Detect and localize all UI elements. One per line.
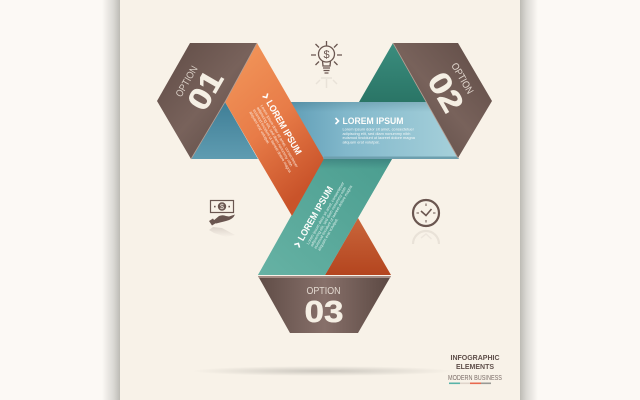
body copy: aliquam erat volutpat. bbox=[248, 110, 271, 145]
body copy: adipiscing elit, sed diam nonummy nibh bbox=[342, 131, 410, 136]
footer title: ELEMENTS bbox=[456, 364, 494, 371]
orange ribbon band bbox=[225, 43, 324, 216]
heading: LOREM IPSUM bbox=[263, 99, 303, 157]
trapezoid 03 top highlight bbox=[258, 276, 391, 278]
left panel shadow bbox=[102, 0, 120, 400]
body copy: adipiscing elit, sed diam nonummy nibh bbox=[309, 186, 347, 247]
body copy: euismod tincidunt ut laoreet dolore magna bbox=[252, 108, 293, 174]
heading: LOREM IPSUM bbox=[296, 185, 336, 243]
clock reflection bbox=[413, 231, 439, 244]
hexagon 01 edge highlight bbox=[191, 43, 257, 159]
blue band inner shadow bbox=[285, 102, 432, 112]
body copy: euismod tincidunt ut laoreet dolore magna bbox=[342, 135, 416, 140]
text block: teal ribbon bbox=[293, 174, 357, 258]
footer title: MODERN BUSINESS bbox=[448, 375, 502, 382]
hexagon 02 edge highlight bbox=[393, 43, 458, 158]
icon: hand holding money bbox=[209, 200, 235, 237]
teal overlap top shadow bbox=[318, 159, 392, 169]
icon: clock bbox=[413, 200, 439, 244]
text block: blue ribbon bbox=[336, 116, 416, 144]
icon: light bulb with dollar: $ bbox=[323, 49, 330, 61]
label: option 02: 02 bbox=[420, 66, 471, 118]
body copy: Lorem ipsum dolor sit amet, consectetuer bbox=[305, 180, 346, 245]
right panel shadow bbox=[520, 0, 538, 400]
body copy: Lorem ipsum dolor sit amet, consectetuer bbox=[342, 126, 415, 132]
blue triangle fold bbox=[191, 102, 258, 159]
label: option 03: OPTION bbox=[306, 286, 340, 297]
body copy: aliquam erat volutpat. bbox=[316, 217, 339, 252]
teal ribbon band bbox=[258, 159, 392, 275]
teal overlap over orange bbox=[258, 159, 392, 275]
label: option 01: 01 bbox=[180, 64, 231, 116]
bulb reflection bbox=[316, 78, 337, 88]
chevron bbox=[262, 93, 269, 99]
body copy bbox=[342, 126, 416, 144]
red triangle fold bbox=[325, 218, 391, 275]
body copy: aliquam erat volutpat. bbox=[342, 139, 380, 144]
blue ribbon band bbox=[285, 102, 459, 159]
body copy: euismod tincidunt ut laoreet dolore magna bbox=[313, 184, 354, 250]
body copy: adipiscing elit, sed diam nonummy nibh bbox=[256, 106, 294, 167]
ground shadow bbox=[192, 366, 452, 376]
footer title bbox=[448, 355, 502, 382]
body copy: Lorem ipsum dolor sit amet, consectetuer bbox=[260, 104, 300, 169]
footer title: INFOGRAPHIC bbox=[450, 355, 500, 362]
chevron bbox=[336, 118, 338, 124]
label: option 01: OPTION bbox=[174, 64, 201, 99]
brown trapezoid 03 bbox=[258, 276, 391, 333]
chevron bbox=[294, 242, 301, 248]
teal triangle fold bbox=[359, 43, 426, 102]
blue band bottom edge bbox=[323, 156, 459, 159]
icon: light bulb with dollar bbox=[311, 41, 342, 88]
icon: hand holding money: $ bbox=[220, 204, 224, 211]
heading: LOREM IPSUM bbox=[342, 116, 404, 127]
footer colour bar bbox=[449, 382, 491, 384]
cream panel bbox=[120, 0, 520, 400]
brown hexagon 02 bbox=[393, 43, 492, 158]
brown hexagon 01 bbox=[157, 43, 257, 159]
text block: orange ribbon bbox=[245, 92, 310, 176]
ribbon diagram bbox=[157, 43, 492, 333]
label: option 02: OPTION bbox=[448, 61, 475, 96]
label: option 03: 03 bbox=[304, 294, 344, 329]
hand reflection bbox=[209, 227, 235, 237]
